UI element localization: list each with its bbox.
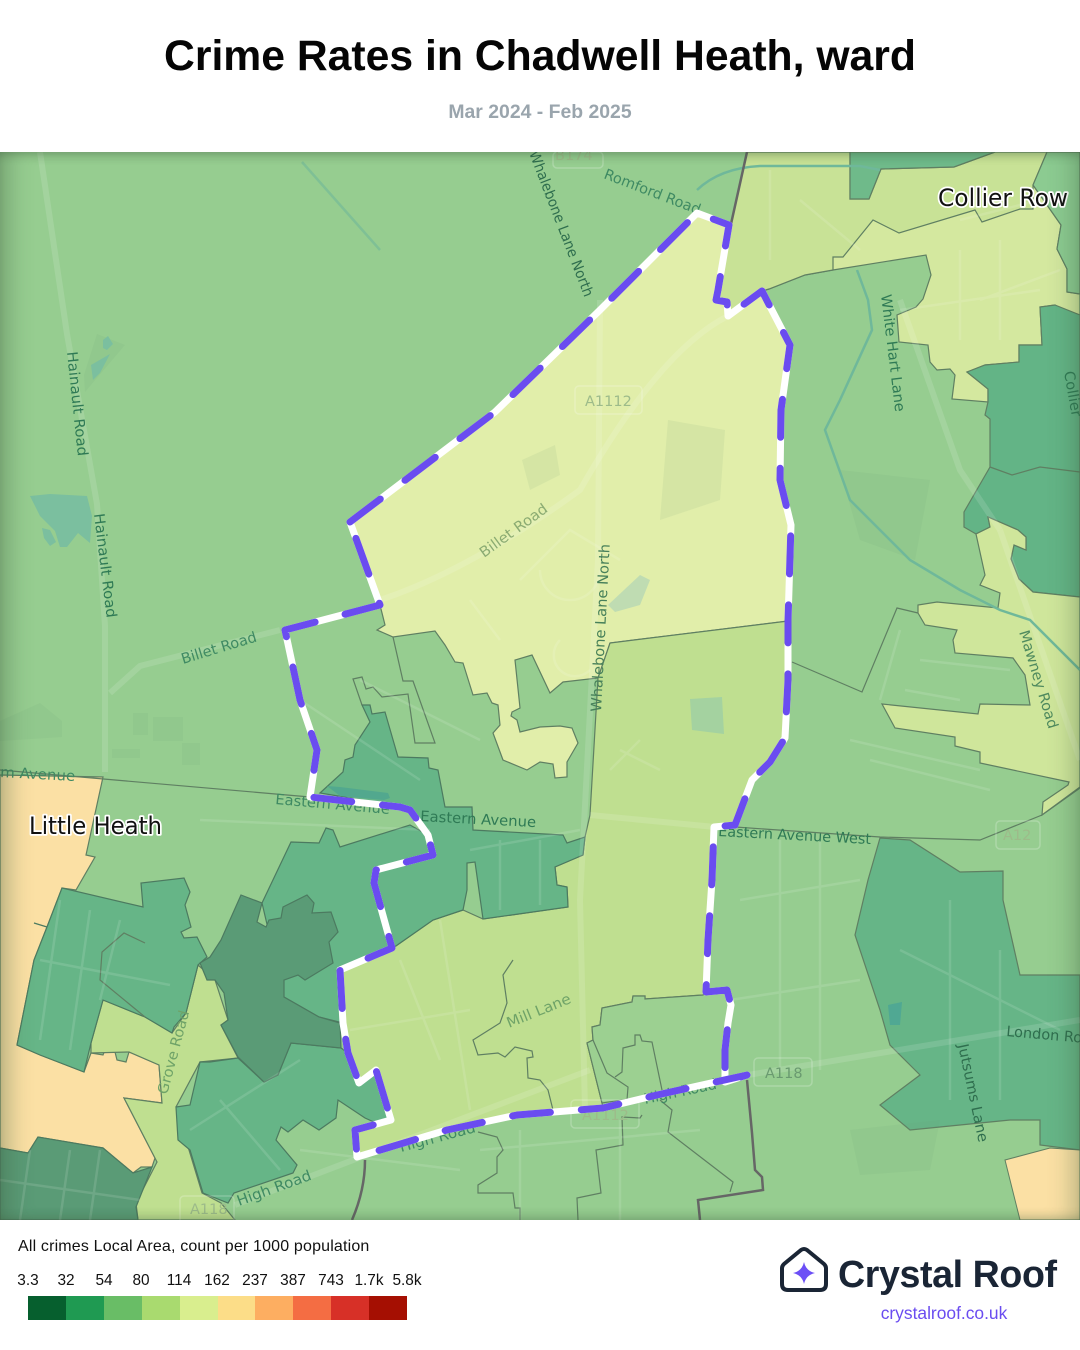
area: pale Mawney Road zone [882, 517, 1080, 815]
legend colour swatches [28, 1296, 407, 1320]
area: Grove Road light zone [91, 965, 238, 1220]
area: green block south-central [176, 1043, 391, 1203]
road A-number shields [180, 152, 1040, 1224]
legend tick labels: 162 [204, 1272, 230, 1289]
legend tick labels: 5.8k [392, 1272, 422, 1289]
road labels: Mawney Road [1015, 628, 1060, 731]
logo wordmark: Crystal Roof [838, 1253, 1057, 1295]
place label: Collier Row: Collier Row [938, 184, 1068, 212]
road labels: A1112 [585, 394, 632, 410]
road labels: Hainault Road [90, 513, 119, 619]
road labels: Mill Lane [505, 991, 574, 1032]
area: dark east block [964, 305, 1080, 597]
road labels: Whalebone Lane North [525, 152, 596, 299]
area: north-east zone below Collier Row [716, 152, 1080, 402]
map [0, 152, 1080, 1220]
legend tick labels: 114 [167, 1272, 191, 1289]
rivers [302, 162, 1080, 670]
road labels: Whalebone Lane North [589, 544, 614, 712]
road labels: Hainault Road [63, 351, 90, 457]
road labels: High Road [398, 1120, 477, 1156]
road labels: Billet Road [179, 630, 259, 668]
area: green block inside ward south [587, 992, 731, 1103]
road labels: Billet Road [477, 501, 551, 561]
land-use patches [0, 334, 940, 1175]
roads [40, 152, 1080, 1205]
boundary lines [0, 467, 1080, 1220]
place label: Little Heath: Little Heath [29, 812, 162, 840]
area: green block west [17, 878, 207, 1072]
legend tick labels: 32 [57, 1272, 75, 1289]
road labels: A118 [190, 1202, 228, 1218]
legend title: All crimes Local Area, count per 1000 population [18, 1238, 369, 1255]
legend tick labels: 387 [280, 1272, 306, 1289]
legend tick labels [17, 1272, 422, 1289]
road labels: A1112 [582, 1108, 629, 1124]
road labels: A118 [765, 1066, 803, 1082]
residential street grid [0, 170, 1060, 1220]
area: upper zone around Romford Road [716, 152, 1047, 316]
title: Crime Rates in Chadwell Heath, ward [164, 32, 916, 80]
road labels: High Road [643, 1077, 718, 1108]
road labels: White Hart Lane [877, 294, 907, 413]
subtitle: date range: Mar 2024 - Feb 2025 [448, 101, 632, 123]
icon: house with star [780, 1247, 828, 1292]
legend tick labels: 237 [242, 1272, 268, 1289]
road labels: Romford Road [602, 167, 703, 218]
legend tick labels: 1.7k [354, 1272, 384, 1289]
road labels: Eastern Avenue [420, 809, 537, 831]
area: darkest central block [200, 895, 341, 1082]
area: teal block top right [1033, 152, 1080, 294]
legend tick labels: 3.3 [17, 1272, 39, 1289]
map edge vignette [0, 152, 1080, 1220]
area: teal block top [850, 152, 995, 199]
road labels: Jutsums Lane [954, 1041, 991, 1144]
area: dark south-east block [855, 838, 1080, 1150]
area: dark south-west block [0, 1137, 152, 1220]
grey borough boundary [352, 152, 763, 1220]
road labels: Grove Road [155, 1009, 193, 1096]
road labels: A12 [1003, 828, 1031, 844]
road labels: High Road [235, 1168, 314, 1210]
area: Little Heath orange zone [0, 775, 162, 1173]
road labels [0, 148, 1080, 1218]
area: orange south-east corner [1005, 1148, 1080, 1220]
road labels: m Avenue [0, 765, 76, 785]
area: southern ward zone [340, 621, 788, 1157]
area: pale northern ward zone [350, 213, 791, 778]
road labels: Eastern Avenue West [718, 824, 872, 848]
logo url: crystalroof.co.uk [881, 1303, 1007, 1323]
area: green block Eastern Avenue [320, 705, 585, 948]
logo: Crystal Roof [780, 1247, 1058, 1295]
legend tick labels: 743 [318, 1272, 344, 1289]
legend tick labels: 54 [95, 1272, 113, 1289]
area: green block central west [262, 825, 433, 1023]
water: lakes and ponds [30, 336, 902, 1025]
legend: colour scale [17, 1272, 422, 1320]
legend tick labels: 80 [132, 1272, 150, 1289]
road labels: Eastern Avenue [275, 792, 391, 818]
ward boundary: white outline with purple dashes [285, 213, 791, 1157]
